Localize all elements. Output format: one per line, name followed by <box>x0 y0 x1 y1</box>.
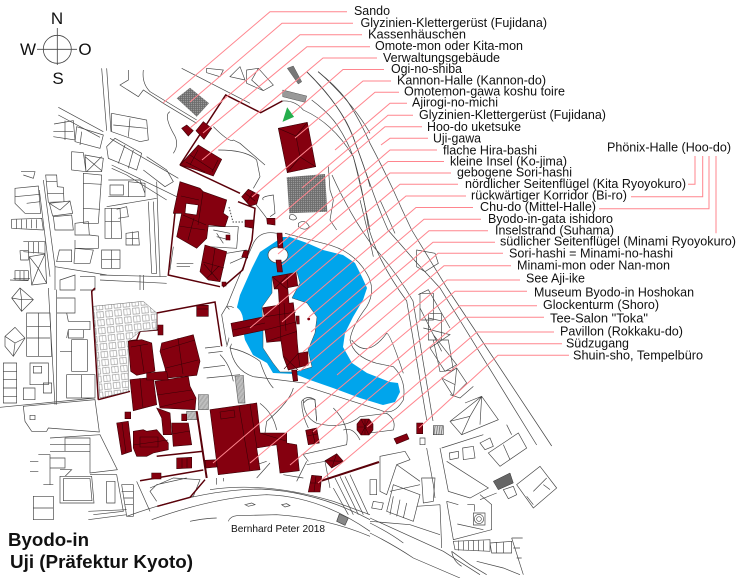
leader: Glyzinien-Klettergerüst north: Glyzinien-Klettergerüst (Fujidana) <box>360 16 547 30</box>
leader: Glyzinien-Klettergerüst Fujidana: Glyzinien-Klettergerüst (Fujidana) <box>419 108 606 122</box>
leader: Omote-mon <box>203 39 523 133</box>
map: southeast streets and buildings <box>370 290 557 578</box>
building: Pavillon Rokkaku-do <box>357 419 373 435</box>
leader: kleine Insel: kleine Insel (Ko-jima) <box>450 155 567 169</box>
leader: Kannon-Halle: Kannon-Halle (Kannon-do) <box>397 74 546 88</box>
compass rose: O <box>78 40 92 59</box>
leader: südlicher Seitenflügel <box>303 235 736 352</box>
building: Verwaltungsgebäude <box>180 145 222 176</box>
title <box>8 529 193 572</box>
leader: Shuin-sho: Shuin-sho, Tempelbüro <box>573 349 703 363</box>
leader: Südzugang: Südzugang <box>566 336 629 350</box>
leader: See Aji-ike: See Aji-ike <box>526 272 585 286</box>
map: northwest streets and town blocks <box>10 67 370 290</box>
leader: Tee-Salon <box>290 311 648 465</box>
leader: Sori-hashi <box>300 246 673 371</box>
building: Shuin-sho <box>394 423 423 444</box>
leader: Sando <box>163 4 390 103</box>
leader: südlicher Seitenflügel: südlicher Seitenflügel (Minami Ryoyokuro) <box>500 235 736 249</box>
buildings: south-west temple complex <box>117 305 208 479</box>
leader: Tee-Salon: Tee-Salon "Toka" <box>550 311 648 325</box>
building: Tee-Salon Toka <box>325 454 343 468</box>
leader: Südzugang <box>318 336 629 483</box>
compass rose: W <box>20 40 36 59</box>
leader: Ajirogi-no-michi <box>335 96 498 150</box>
leader: Glyzinien-Klettergerüst north <box>190 16 547 102</box>
leader: Inselstrand: Inselstrand (Suhama) <box>495 223 614 237</box>
compass rose: N <box>51 9 63 28</box>
building: Phoenix hall Hoo-do with wings and bridges <box>231 233 310 381</box>
leader: flache Hira-bashi: flache Hira-bashi <box>443 143 537 157</box>
leader: Kannon-Halle <box>295 74 546 138</box>
compass rose: S <box>52 69 64 88</box>
building: west complex south <box>200 245 227 282</box>
building: Shoro bell tower <box>306 428 319 445</box>
hatched area: south steps <box>433 426 443 435</box>
building: Kassenhäuschen <box>182 125 193 136</box>
small island Ko-jima <box>268 247 288 263</box>
building: large hall north of the pond <box>278 122 316 173</box>
leader: Uji-gawa <box>381 132 481 146</box>
boundary walls <box>92 95 379 506</box>
title: Uji (Präfektur Kyoto) <box>10 551 193 572</box>
small buildings west precinct <box>222 189 275 286</box>
map: hatched stairs south <box>187 375 348 525</box>
hatched area: Glyzinien-Klettergerüst north <box>177 88 209 117</box>
leader: Glockenturm: Glockenturm (Shoro) <box>543 298 659 312</box>
map: southwest streets, blocks and roads <box>0 288 370 536</box>
leader: Museum: Museum Byodo-in Hoshokan <box>534 285 694 299</box>
leader: Sando: Sando <box>354 4 390 18</box>
leader: Minami-mon <box>213 258 670 463</box>
leader: Inselstrand <box>311 223 614 332</box>
hatched area: Glyzinien-Klettergerüst Fujidana <box>287 174 327 213</box>
pond: See Aji-ike <box>237 237 400 405</box>
leader: Hoo-do uketsuke: Hoo-do uketsuke <box>427 120 521 134</box>
leader: nördlicher Seitenflügel <box>282 177 686 283</box>
leader: Pavillon <box>367 325 683 427</box>
leader: Uji-gawa: Uji-gawa <box>433 132 481 146</box>
leader: Ogi-no-shiba <box>292 62 462 114</box>
hatched area: Sando stairs <box>283 90 307 102</box>
leader: Shuin-sho <box>419 349 703 428</box>
building: Museum Hoshokan <box>205 403 299 475</box>
leader: Minami-mon: Minami-mon oder Nan-mon <box>517 258 670 272</box>
leader: Ogi-no-shiba: Ogi-no-shiba <box>391 62 462 76</box>
icon: green triangle Ogi-no-shiba <box>283 108 293 121</box>
leader: Verwaltungsgebäude: Verwaltungsgebäude <box>383 51 500 65</box>
callout: Phönix-Halle with four leaders: Phönix-Halle (Hoo-do) <box>607 141 731 155</box>
leader: nördlicher Seitenflügel: nördlicher Seitenflügel (Kita Ryoyokuro) <box>465 177 686 191</box>
leader: Pavillon: Pavillon (Rokkaku-do) <box>560 325 683 339</box>
leader: Omote-mon: Omote-mon oder Kita-mon <box>375 39 523 53</box>
leader: Chu-do: Chu-do (Mittel-Halle) <box>480 200 596 214</box>
dotted path courtyard <box>229 207 245 222</box>
leader: Omotemon-gawa koshu toire <box>252 84 565 197</box>
leader: See Aji-ike <box>337 272 585 375</box>
leader: Glyzinien-Klettergerüst Fujidana <box>302 108 606 188</box>
leader: gebogene Sori-hashi <box>282 166 572 265</box>
leader: Byodo-in-gata ishidoro <box>309 212 613 317</box>
building: Südzugang <box>308 475 322 492</box>
hatched area: east steps <box>493 473 513 490</box>
leader: Sori-hashi: Sori-hashi = Minami-no-hashi <box>509 246 673 260</box>
leader: flache Hira-bashi <box>279 143 537 245</box>
leader: kleine Insel <box>278 155 567 254</box>
building: west complex north <box>173 182 228 248</box>
leader: Omotemon-gawa koshu toire: Omotemon-gawa koshu toire <box>404 84 565 98</box>
callout: Phönix-Halle with four leaders <box>599 141 731 233</box>
leader: Glockenturm <box>313 298 659 432</box>
leader: rückwärtiger Korridor: rückwärtiger Korridor (Bi-ro) <box>471 188 627 202</box>
leader: Kassenhäuschen: Kassenhäuschen <box>368 28 466 42</box>
leader: Kassenhäuschen <box>190 28 466 128</box>
island in the pond <box>262 272 317 372</box>
leader: Ajirogi-no-michi: Ajirogi-no-michi <box>412 96 498 110</box>
credit: Bernhard Peter 2018 <box>231 523 325 535</box>
compass rose <box>20 9 92 88</box>
leader: Chu-do <box>282 200 596 322</box>
leader: Museum <box>250 285 694 463</box>
leader: Byodo-in-gata ishidoro: Byodo-in-gata ishidoro <box>488 212 613 226</box>
title: Byodo-in <box>8 529 89 550</box>
cemetery grid <box>93 301 157 398</box>
leader: rückwärtiger Korridor <box>250 188 627 328</box>
leader: Verwaltungsgebäude <box>202 51 500 160</box>
building: Omote-mon <box>196 122 212 139</box>
leader: Hoo-do uketsuke <box>275 120 521 220</box>
map: northeast curved streets along the river <box>307 72 552 446</box>
peninsula west shore <box>226 307 243 345</box>
leader: gebogene Sori-hashi: gebogene Sori-hashi <box>457 166 572 180</box>
map: paths around the pond <box>227 200 453 440</box>
hatched area: north gate stairs <box>287 66 302 84</box>
